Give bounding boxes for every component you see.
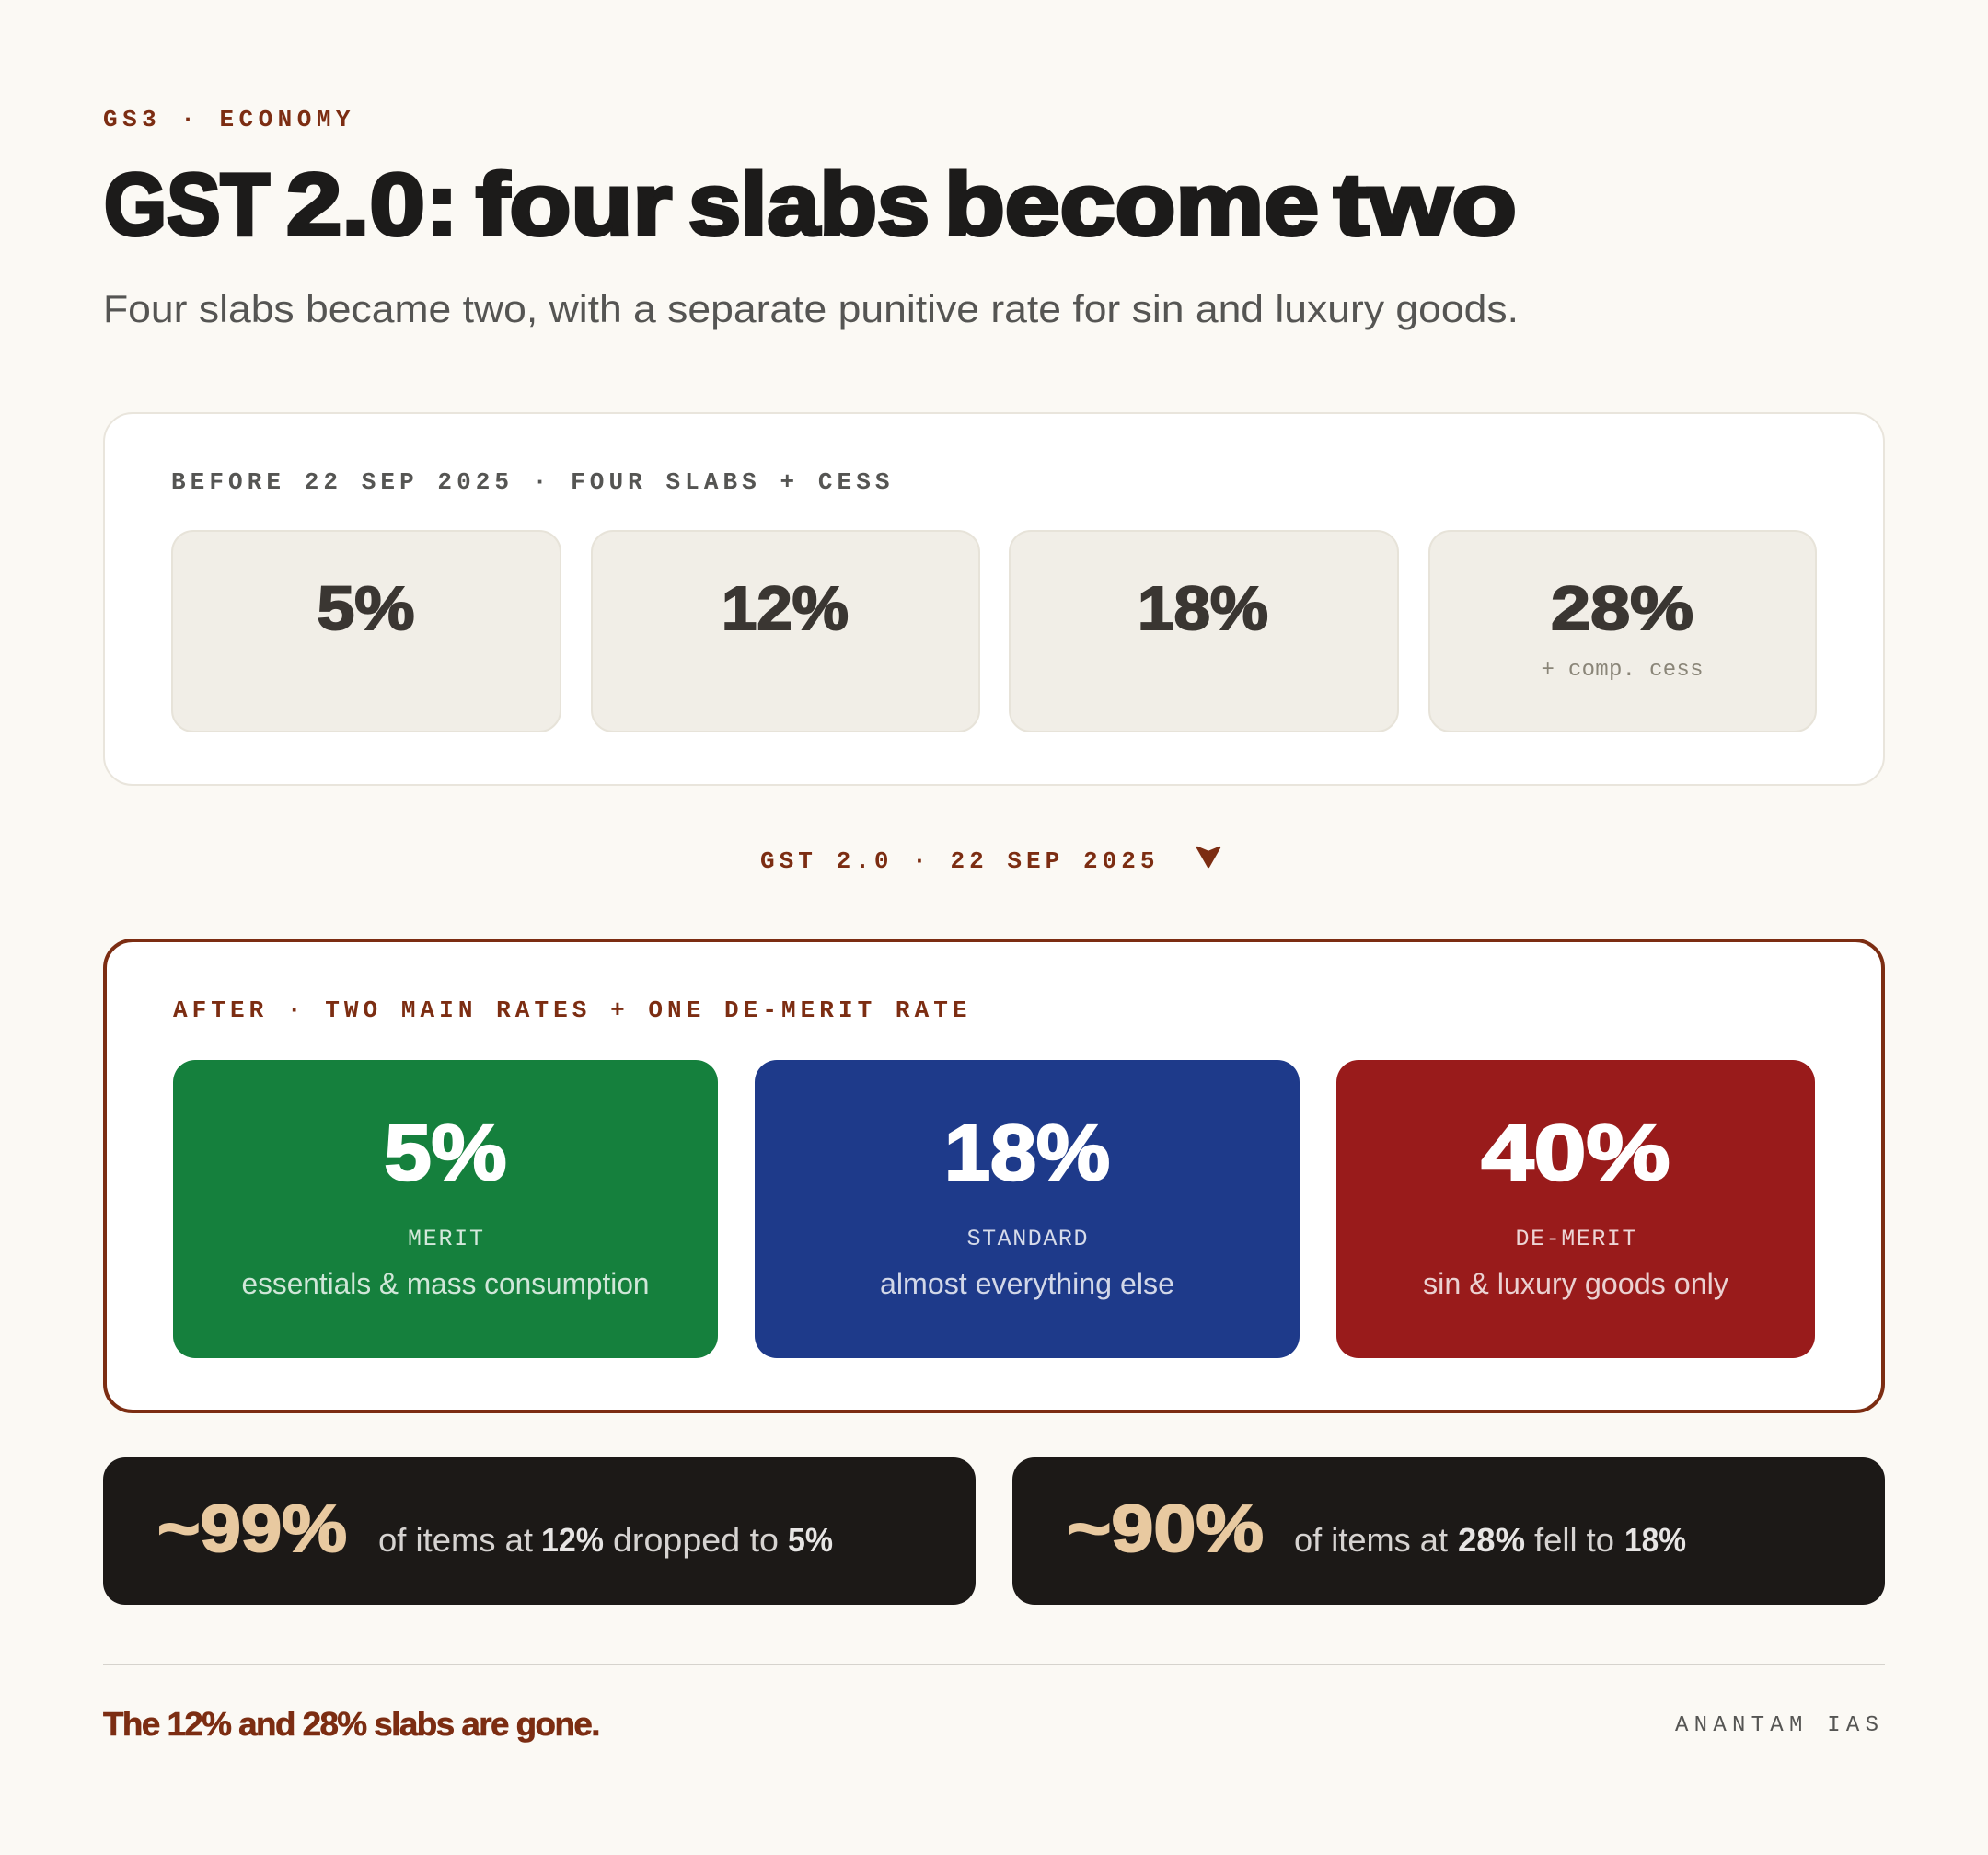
rate card: standard: [755, 1060, 1300, 1358]
rate card: standard: almost everything else: [880, 1267, 1174, 1300]
slab card 18%: 18%: [1138, 574, 1268, 643]
slab card 12%: 12%: [722, 574, 849, 643]
stat box: 99 percent: 12%: [541, 1521, 604, 1559]
header: [103, 106, 1519, 330]
stat box: 90 percent: [1012, 1458, 1885, 1605]
footer brand: ANANTAM IAS: [1675, 1713, 1878, 1738]
subtitle: Four slabs became two, with a separate punitive rate for sin and luxury goods.: [103, 287, 1519, 330]
slab card 28% with cess note: + comp. cess: [1541, 658, 1703, 683]
title: four: [476, 156, 672, 254]
rate card: merit: [173, 1060, 718, 1358]
arrow: down: [1197, 847, 1219, 867]
rate card: standard: STANDARD: [966, 1226, 1088, 1252]
rate card: standard: 18%: [944, 1110, 1110, 1197]
title: slabs: [688, 156, 930, 254]
slab card 5%: 5%: [317, 574, 414, 643]
eyebrow: GS3 · ECONOMY: [103, 106, 351, 133]
slab card 28% with cess note: 28%: [1551, 574, 1693, 643]
before heading: BEFORE 22 SEP 2025 · FOUR SLABS + CESS: [171, 468, 889, 496]
transition label: GST 2.0 · 22 SEP 2025: [760, 847, 1154, 875]
rate card: merit: essentials & mass consumption: [241, 1267, 650, 1300]
rate card: de-merit: [1336, 1060, 1815, 1358]
title: [104, 156, 1517, 254]
slab card 12%: [592, 531, 979, 732]
footer takeaway: The 12% and 28% slabs are gone.: [103, 1705, 599, 1743]
title: GST: [104, 156, 270, 254]
rate card: de-merit: 40%: [1482, 1110, 1670, 1197]
stat box: 99 percent: 5%: [788, 1521, 833, 1559]
panel: before: [104, 413, 1884, 785]
title: 2.0:: [286, 156, 458, 254]
slab card 5%: [172, 531, 561, 732]
stat box: 99 percent: dropped to: [613, 1521, 779, 1559]
slab card 18%: [1010, 531, 1398, 732]
stat box: 99 percent: [103, 1458, 976, 1605]
slab card 28% with cess note: [1429, 531, 1816, 732]
stat box: 90 percent: fell to: [1534, 1521, 1614, 1559]
rate card: merit: MERIT: [408, 1226, 483, 1252]
stat box: 90 percent: 28%: [1458, 1521, 1525, 1559]
after heading: AFTER · TWO MAIN RATES + ONE DE-MERIT RATE: [173, 997, 966, 1024]
stat box: 99 percent: of items at: [378, 1521, 533, 1559]
stat box: 90 percent: of items at: [1294, 1521, 1448, 1559]
rate card: de-merit: sin & luxury goods only: [1423, 1267, 1728, 1300]
stat box: 90 percent: ~90%: [1067, 1492, 1264, 1566]
rate card: merit: 5%: [385, 1110, 506, 1197]
rate card: de-merit: DE-MERIT: [1515, 1226, 1636, 1252]
title: become: [944, 156, 1319, 254]
title: two: [1334, 156, 1517, 254]
stat box: 99 percent: ~99%: [157, 1492, 347, 1566]
panel: after: [105, 940, 1883, 1411]
stat box: 90 percent: 18%: [1624, 1521, 1686, 1559]
